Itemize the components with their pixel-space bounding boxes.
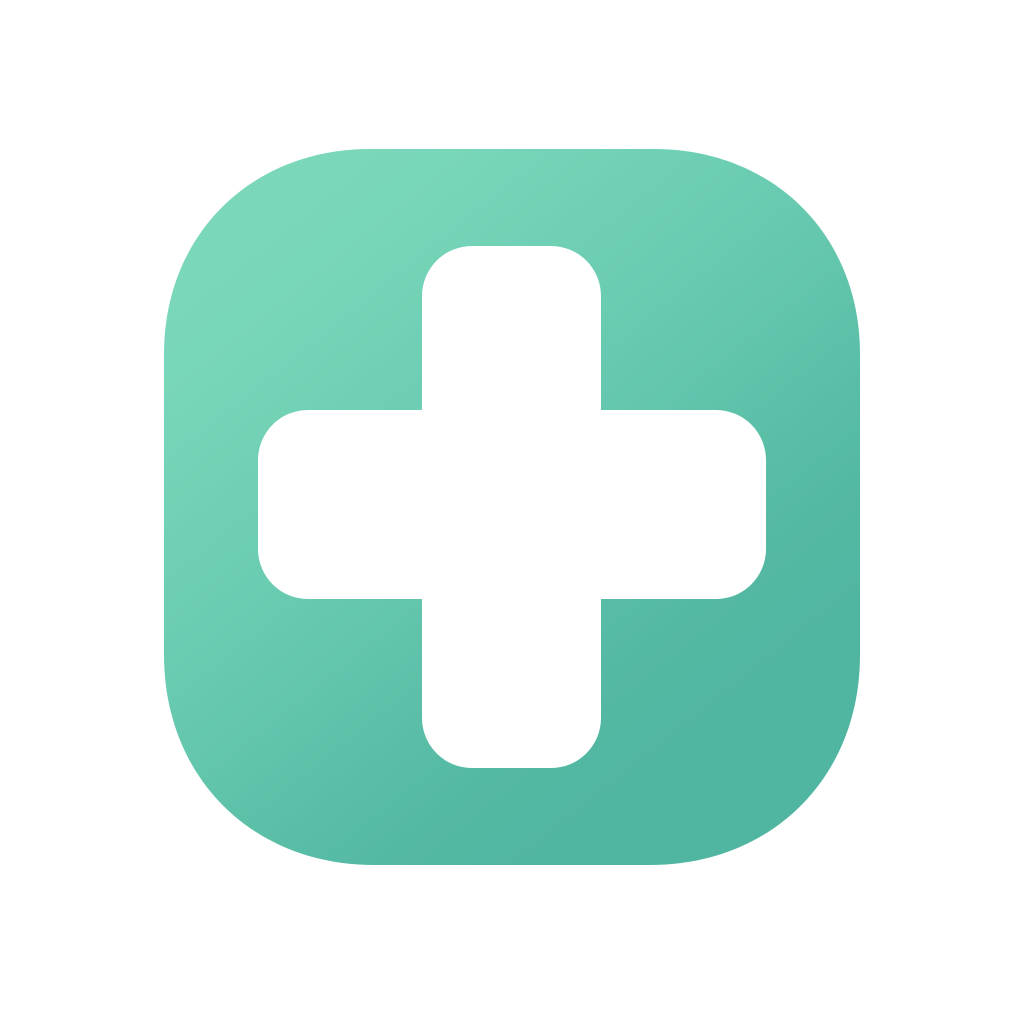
white cross [258,246,766,768]
rounded square background [164,149,860,865]
